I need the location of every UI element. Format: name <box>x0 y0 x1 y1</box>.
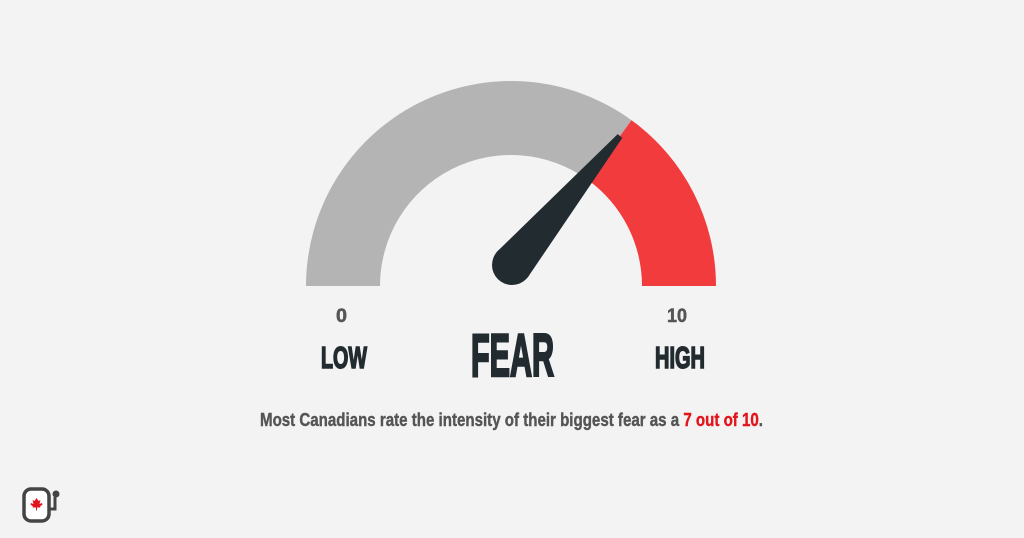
logo <box>24 489 60 521</box>
needle <box>492 134 622 285</box>
icon: maple leaf <box>30 498 42 510</box>
caption: Most Canadians rate the intensity of their biggest fear as a 7 out of 10. <box>260 410 763 430</box>
scale label 10: 10 <box>667 306 687 327</box>
label LOW: LOW <box>321 340 367 375</box>
scale label 0: 0 <box>336 306 347 327</box>
label HIGH: HIGH <box>655 340 705 375</box>
title FEAR: FEAR <box>471 322 554 389</box>
gauge <box>306 81 716 286</box>
gauge red segment <box>588 120 716 286</box>
gauge grey segment <box>306 81 632 286</box>
